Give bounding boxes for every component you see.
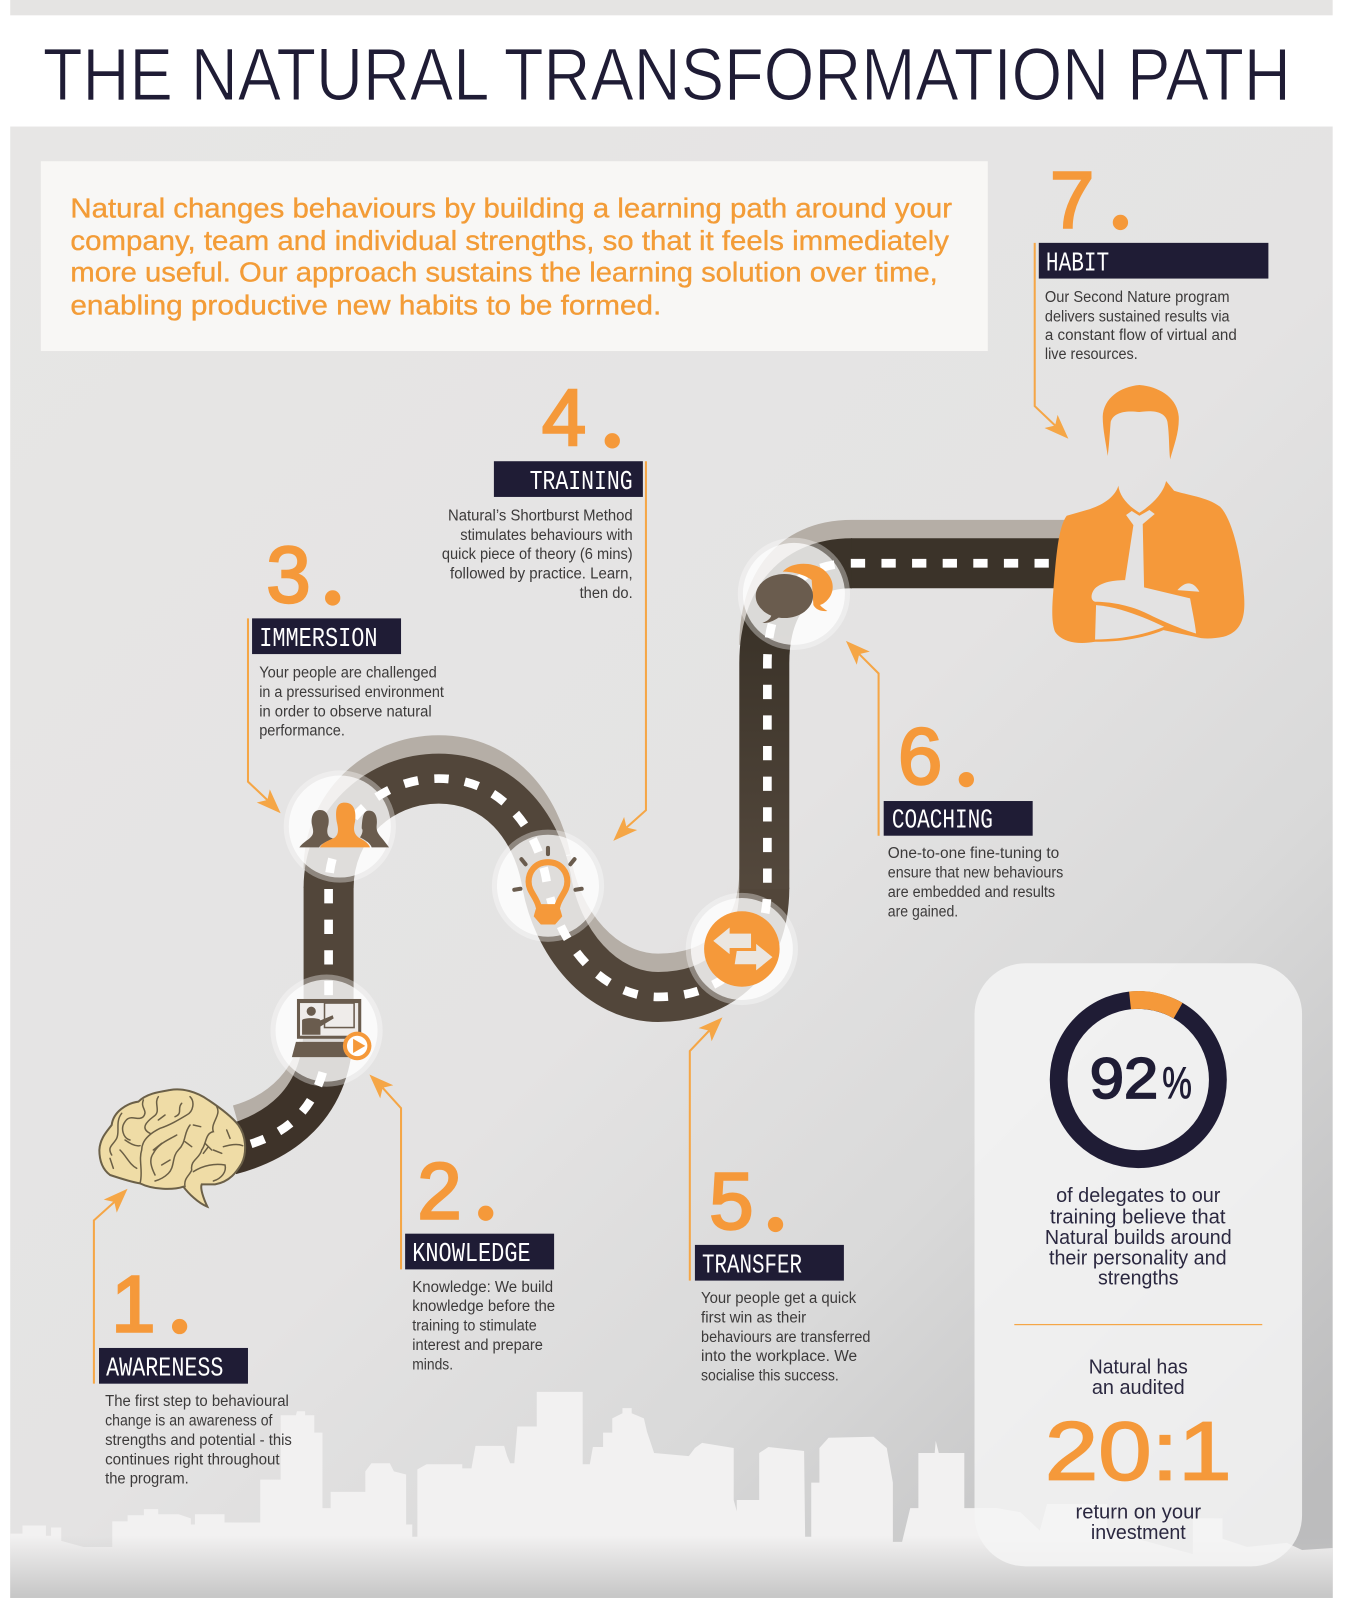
intro panel [41, 161, 988, 351]
text: delegates statement: training believe that [1050, 1206, 1226, 1228]
step 1: awareness: change is an awareness of [105, 1413, 273, 1430]
intro panel: more useful. Our approach sustains the learning solution over time, [70, 257, 938, 288]
step 1: awareness: AWARENESS [106, 1354, 223, 1384]
step 4: training: TRAINING [530, 467, 633, 497]
step 2: knowledge: 2 [417, 1146, 462, 1235]
step 2: knowledge: training to stimulate [412, 1318, 537, 1335]
icon: laptop marker [270, 974, 383, 1087]
step 2: knowledge: minds. [412, 1356, 453, 1373]
step 3: immersion: Your people are challenged [259, 665, 437, 682]
stat: 92% [1090, 1047, 1192, 1111]
stat: 92%: 92 [1090, 1047, 1158, 1111]
step 7: habit: Our Second Nature program [1045, 289, 1230, 306]
step 5: transfer: 5 [709, 1157, 753, 1246]
step 6: coaching: are embedded and results [888, 884, 1055, 901]
step 7: habit: HABIT [1046, 248, 1109, 278]
stat: 92%: % [1162, 1057, 1192, 1108]
step 2: knowledge: knowledge before the [412, 1298, 555, 1315]
step 3: immersion: in order to observe natural [259, 703, 432, 720]
road shadow [240, 545, 1066, 1130]
step 3: immersion: 3 [266, 530, 311, 619]
step 7: habit: 7 [1050, 156, 1094, 245]
intro panel: company, team and individual strengths, so that it feels immediately [70, 225, 949, 256]
text: delegates statement: Natural builds around [1045, 1227, 1232, 1249]
step 6: coaching [846, 641, 1064, 920]
step 5: transfer: first win as their [701, 1309, 806, 1326]
text: audited: an audited [1092, 1377, 1185, 1399]
text: audited [1089, 1356, 1188, 1399]
step 2: knowledge: Knowledge: We build [412, 1279, 553, 1296]
step 1: awareness: 1 [111, 1260, 156, 1349]
step 5: transfer: behaviours are transferred [701, 1329, 870, 1346]
text: delegates statement: strengths [1098, 1268, 1179, 1290]
step 4: training: then do. [580, 585, 633, 602]
step 6: coaching: One-to-one fine-tuning to [888, 845, 1059, 862]
step 6: coaching: ensure that new behaviours [888, 865, 1064, 882]
text: audited: Natural has [1089, 1356, 1188, 1378]
step 5: transfer [690, 1017, 870, 1385]
text: delegates statement: of delegates to our [1056, 1185, 1221, 1207]
icon: person with crossed arms [1052, 385, 1244, 643]
step 3: immersion: performance. [259, 723, 345, 740]
step 5: transfer: socialise this success. [701, 1368, 839, 1385]
step 4: training: followed by practice. Learn, [450, 566, 633, 583]
step 6: coaching: COACHING [892, 806, 993, 836]
icon: swap arrows marker [686, 893, 798, 1005]
step 4: training: stimulates behaviours with [460, 527, 633, 544]
panel: statistics card [975, 963, 1302, 1566]
step 4: training: Natural’s Shortburst Method [448, 507, 633, 524]
intro panel: Natural changes behaviours by building a learning path around your [70, 192, 952, 223]
icon: brain [99, 1089, 245, 1207]
intro panel: enabling productive new habits to be formed. [70, 289, 661, 320]
step 5: transfer: Your people get a quick [701, 1290, 856, 1307]
stat: 20:1: 20:1 [1045, 1405, 1232, 1498]
step 1: awareness [94, 1189, 292, 1488]
text: delegates statement: their personality and [1049, 1247, 1227, 1269]
text: delegates statement [1045, 1185, 1232, 1290]
donut chart: 92% [1059, 1000, 1218, 1159]
step 2: knowledge [369, 1074, 555, 1373]
top grey strip [10, 0, 1333, 15]
text: return on investment [1076, 1501, 1201, 1544]
step 1: awareness: continues right throughout [105, 1451, 280, 1468]
text: return on investment: investment [1091, 1522, 1186, 1544]
step 3: immersion [248, 530, 445, 813]
step 4: training: 4 [542, 373, 586, 462]
step 2: knowledge: KNOWLEDGE [412, 1239, 531, 1269]
step 3: immersion: in a pressurised environment [259, 684, 445, 701]
step 4: training: quick piece of theory (6 mins) [442, 546, 633, 563]
step 7: habit: live resources. [1045, 346, 1138, 363]
step 4: training [442, 373, 646, 841]
step 5: transfer: into the workplace. We [701, 1348, 857, 1365]
step 1: awareness: The first step to behavioural [105, 1393, 289, 1410]
step 3: immersion: IMMERSION [259, 624, 378, 654]
icon: chat bubbles marker [738, 538, 850, 650]
icon: people marker [284, 770, 396, 883]
step 7: habit: delivers sustained results via [1045, 308, 1230, 325]
step 6: coaching: are gained. [888, 903, 958, 920]
icon: light bulb marker [492, 830, 604, 942]
step 1: awareness: the program. [105, 1471, 189, 1488]
city skyline [10, 1392, 1333, 1598]
step 1: awareness: strengths and potential - this [105, 1432, 292, 1449]
step 7: habit: a constant flow of virtual and [1045, 327, 1237, 344]
step 5: transfer: TRANSFER [702, 1250, 802, 1280]
step 6: coaching: 6 [898, 712, 942, 801]
winding road [230, 563, 1066, 1150]
step 2: knowledge: interest and prepare [412, 1337, 543, 1354]
step 7: habit [1035, 156, 1268, 439]
text: return on investment: return on your [1076, 1501, 1201, 1523]
